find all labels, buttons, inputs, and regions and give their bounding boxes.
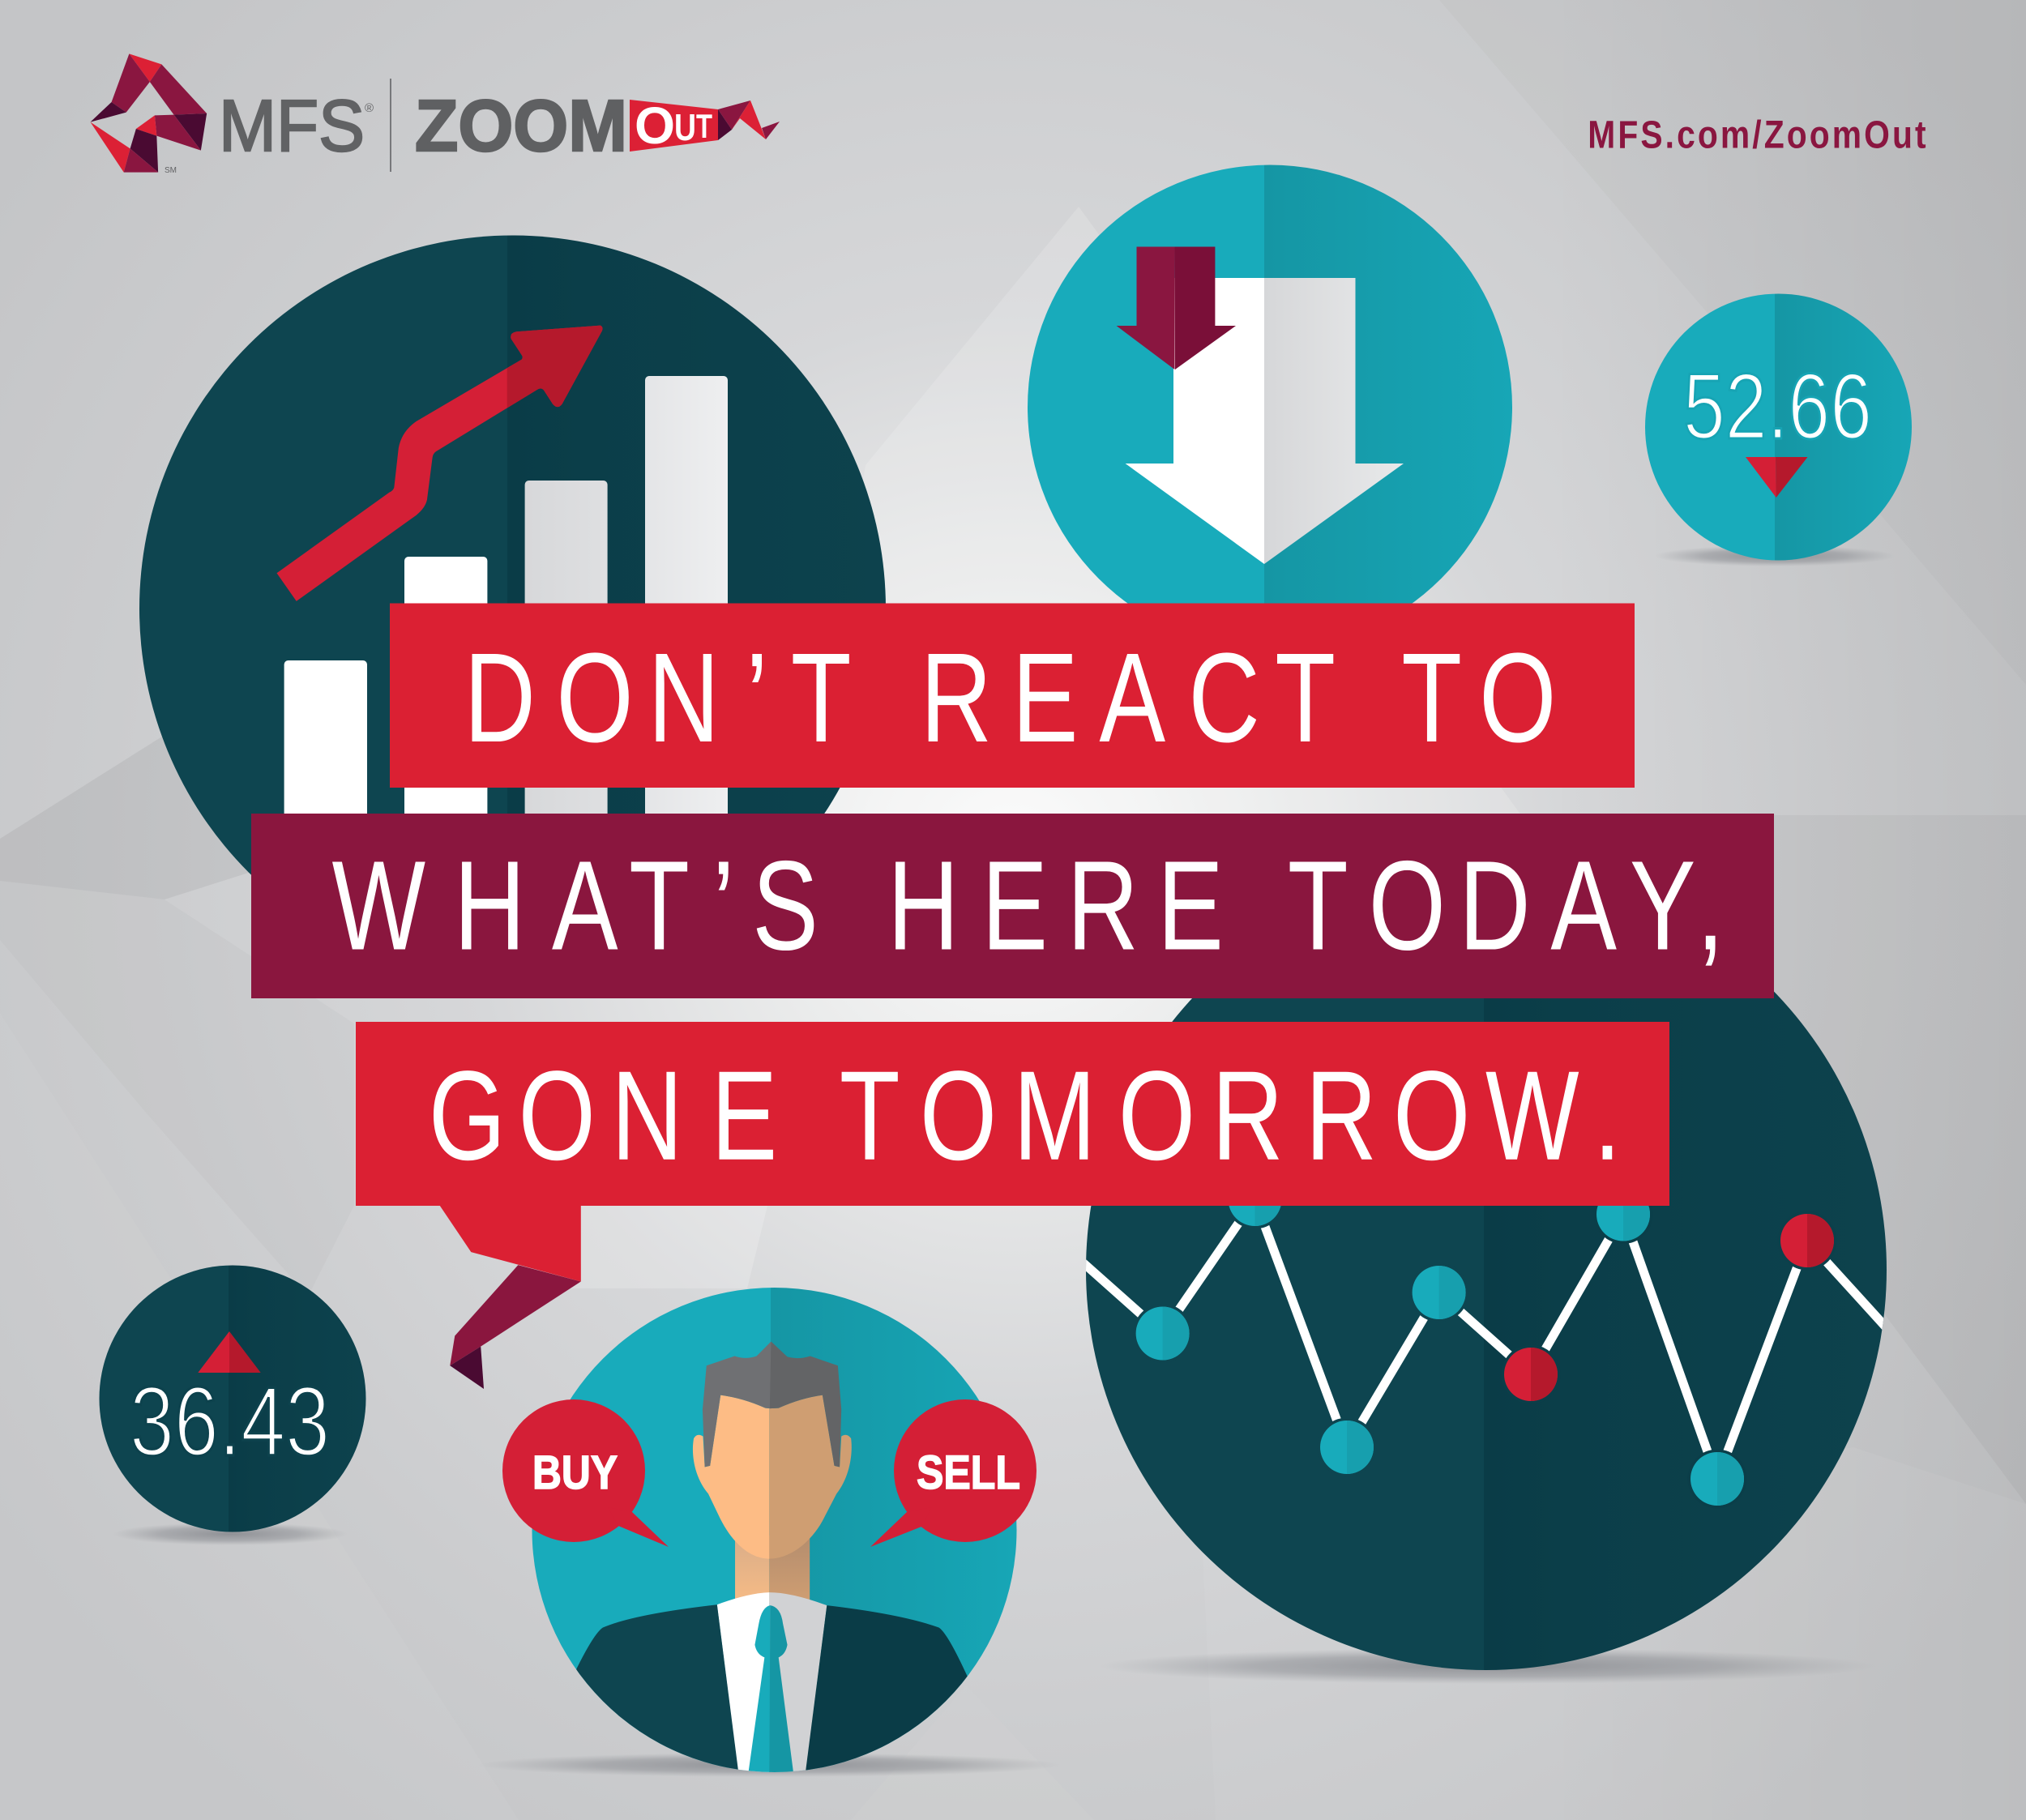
icon: red up triangle: [198, 1331, 261, 1373]
bubble: SELL: SELL: [917, 1446, 1020, 1499]
logo text: SM: SM: [165, 166, 177, 175]
icon: red down triangle: [1746, 457, 1807, 498]
headline line 1: [390, 603, 1635, 788]
bubble: BUY: [502, 1399, 669, 1547]
bubble: SELL: [870, 1399, 1037, 1547]
icon: red rising arrow: [276, 326, 603, 601]
panel: ticker 52.66: [1645, 293, 1913, 561]
icon: businessman: [576, 1342, 968, 1772]
line chart polyline: [1086, 1220, 1883, 1454]
panel: investor portrait circle: [502, 1288, 1037, 1811]
headline line 2: WHAT’S HERE TODAY,: [331, 835, 1725, 976]
headline banner: [356, 1022, 1669, 1206]
ground shadows: [113, 545, 1895, 1777]
speech tail ribbon: [438, 1203, 581, 1389]
panel: ticker 36.43: [99, 1265, 366, 1532]
icon: large white down arrow: [1126, 278, 1404, 564]
icon: small maroon down arrow: [1117, 246, 1236, 370]
headline line 1: DON’T REACT TO: [464, 626, 1556, 768]
headline text: GONE TOMORROW.: [429, 1045, 1621, 1186]
logo ribbon: OUT: U: [674, 106, 696, 148]
logo text: registered mark: ®: [365, 101, 374, 115]
icon: MFS origami mark: [91, 53, 207, 173]
number: 36.43: 36.43: [130, 1366, 330, 1476]
logo: MFS Zoom Out: [91, 53, 780, 175]
bubble: BUY: BUY: [532, 1446, 618, 1499]
url text: MFS.com/ZoomOut: [1588, 113, 1926, 156]
chart nodes: [1133, 1170, 1836, 1509]
logo ribbon: OUT: [630, 96, 780, 155]
bars: [284, 376, 728, 824]
panel: bar chart circle: [139, 235, 886, 875]
logo text: ZOOM: ZOOM: [415, 86, 627, 167]
logo divider: [390, 79, 391, 172]
number: 52.66: 52.66: [1683, 355, 1872, 459]
logo text: MFS: MFS: [219, 86, 365, 167]
logo ribbon: OUT: O: [635, 96, 675, 155]
logo ribbon: OUT: T: [696, 107, 712, 145]
headline line 3 with speech tail: [356, 1022, 1669, 1389]
panel: teal circle with down arrows: [1028, 164, 1513, 651]
panel: line chart circle: [1086, 992, 1887, 1670]
